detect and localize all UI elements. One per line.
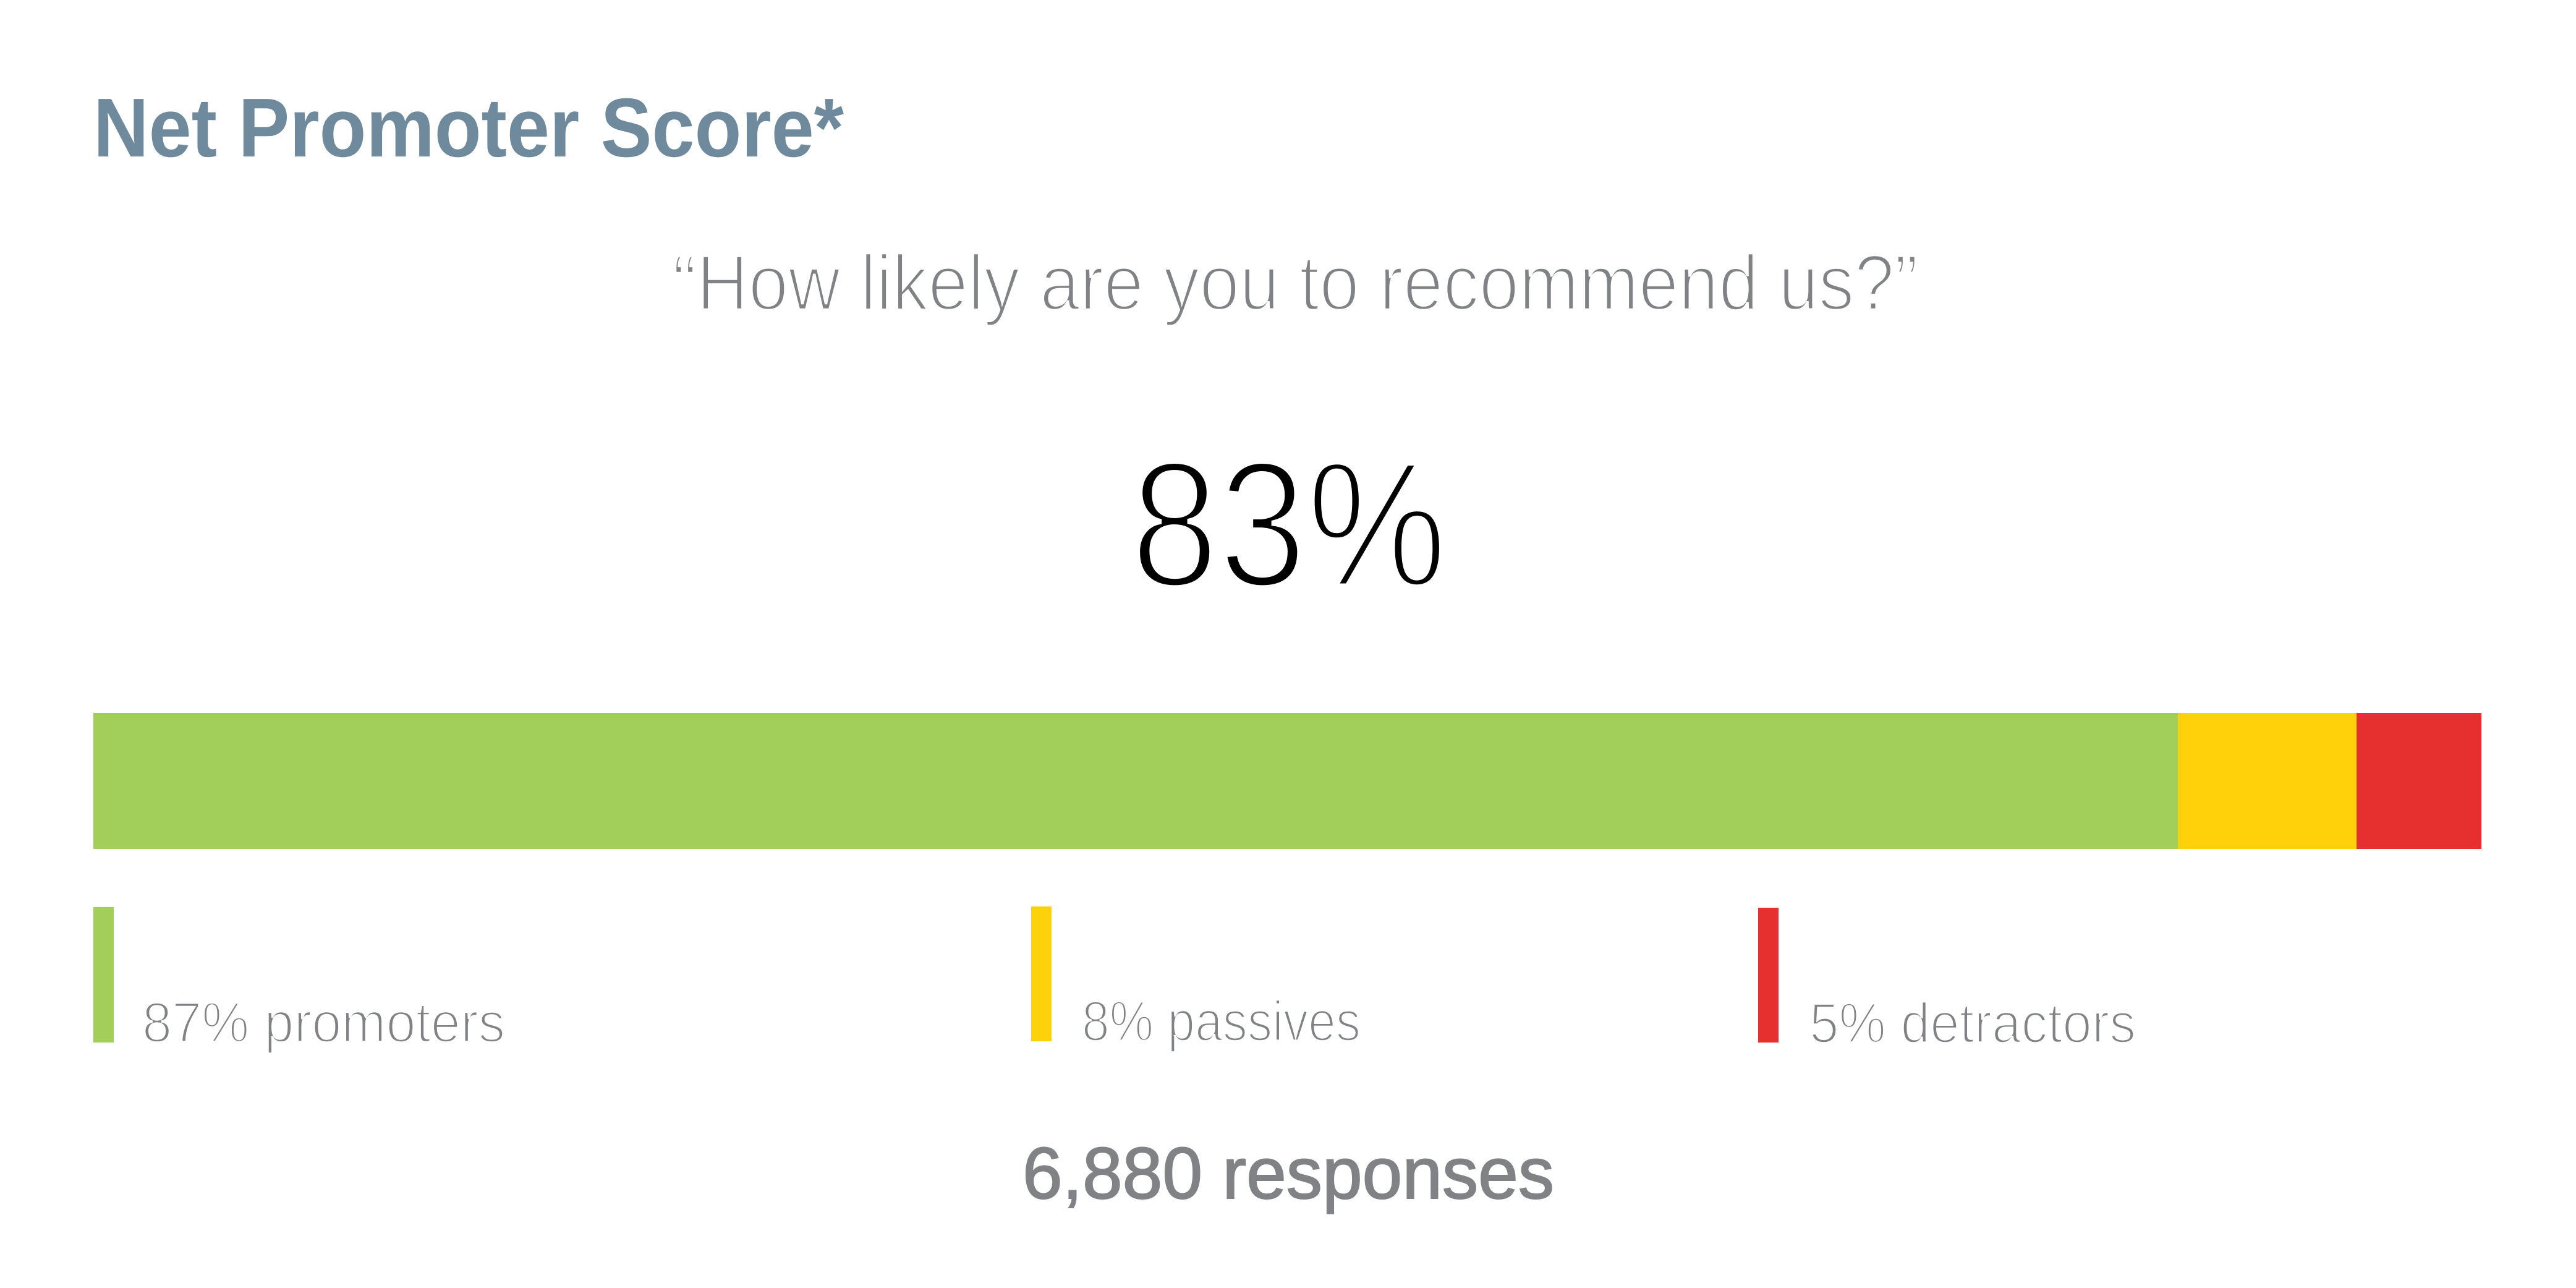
headline score: 83% (1131, 424, 1447, 625)
bar segment: passives (2178, 713, 2357, 849)
legend label: detractors: 5% detractors (1809, 992, 2136, 1055)
legend: detractors (1758, 908, 2136, 1055)
title: Net Promoter Score* (93, 81, 844, 174)
bar segment: promoters (93, 713, 2178, 849)
legend swatch: detractors (1758, 908, 1779, 1043)
survey question: “How likely are you to recommend us?” (673, 239, 1918, 326)
legend label: passives: 8% passives (1082, 990, 1361, 1053)
legend label: promoters: 87% promoters (142, 991, 505, 1054)
bar segment: detractors (2357, 713, 2481, 849)
legend swatch: promoters (93, 907, 114, 1043)
stacked bar chart (93, 713, 2481, 849)
legend: promoters (93, 907, 505, 1054)
legend swatch: passives (1031, 906, 1052, 1041)
legend: passives (1031, 906, 1361, 1053)
response count: 6,880 responses (1022, 1133, 1554, 1214)
